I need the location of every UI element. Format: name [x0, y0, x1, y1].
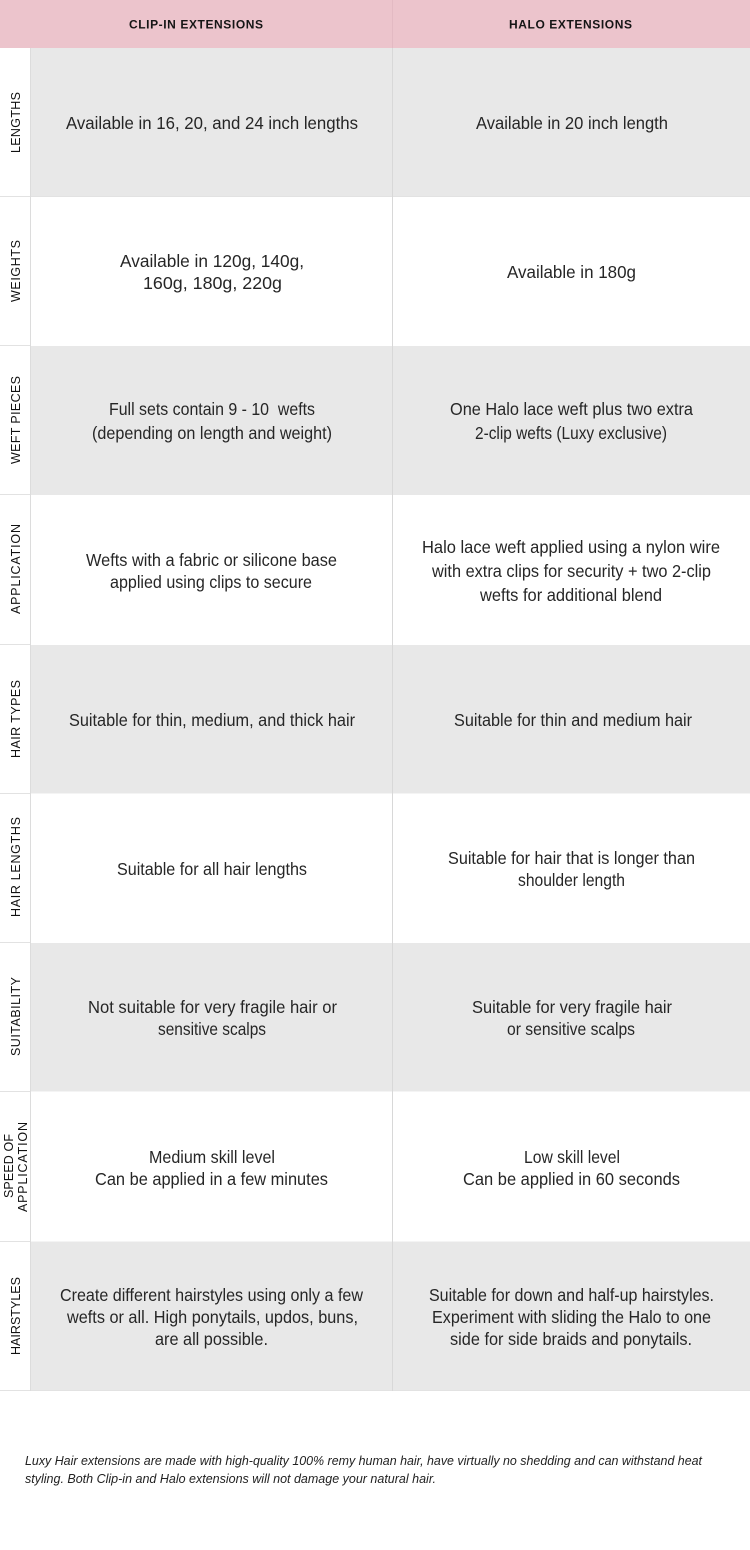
halo: suitability: or sensitive scalps [507, 1019, 635, 1039]
clip-in: suitability: Not suitable for very fragile hair or [88, 997, 337, 1017]
row: hairstyles [0, 1242, 750, 1391]
clip-in: speed of application [95, 1147, 328, 1189]
row: speed of application [0, 1122, 680, 1242]
header row [0, 0, 750, 48]
halo: speed of application [463, 1147, 680, 1189]
clip-in: weights: Available in 120g, 140g, [120, 251, 304, 271]
clip-in: weft pieces: Full sets contain 9 - 10 wefts [109, 399, 315, 419]
halo: weft pieces [450, 399, 693, 443]
row: suitability [0, 943, 750, 1092]
halo: hair lengths: Suitable for hair that is longer than [448, 848, 695, 868]
halo: hairstyles: side for side braids and ponytails. [450, 1329, 692, 1349]
halo: hair types: Suitable for thin and medium hair [454, 710, 692, 730]
halo: application: with extra clips for security + two 2-clip [431, 561, 711, 581]
row label: speed of application: APPLICATION [16, 1122, 30, 1212]
row label: application: APPLICATION [9, 524, 23, 614]
clip-in: speed of application: Can be applied in a few minutes [95, 1169, 328, 1189]
halo: hairstyles: Suitable for down and half-up hairstyles. [429, 1285, 714, 1305]
row: weft pieces [0, 346, 750, 495]
halo: suitability [472, 997, 672, 1039]
clip-in: application: applied using clips to secure [110, 572, 312, 592]
row: hair lengths [0, 817, 695, 943]
footnote [25, 1454, 703, 1486]
clip-in: suitability [88, 997, 337, 1039]
halo: hairstyles [429, 1285, 714, 1349]
clip-in: hairstyles: are all possible. [155, 1329, 268, 1349]
clip-in: weft pieces [92, 399, 332, 443]
row: weights [0, 240, 636, 346]
row label: hair types: HAIR TYPES [9, 680, 23, 758]
row label: speed of application [2, 1122, 30, 1212]
halo: speed of application: Low skill level [524, 1147, 620, 1167]
row: application [0, 524, 720, 645]
row label: speed of application: SPEED OF [2, 1134, 16, 1198]
halo: application: Halo lace weft applied using a nylon wire [422, 537, 720, 557]
row label: hairstyles: HAIRSTYLES [9, 1277, 23, 1355]
clip-in: speed of application: Medium skill level [149, 1147, 275, 1167]
clip-in: lengths: Available in 16, 20, and 24 inch lengths [66, 113, 358, 133]
halo: weights: Available in 180g [507, 262, 636, 282]
halo: application [422, 537, 720, 605]
heading: clip-in extensions: CLIP-IN EXTENSIONS [129, 18, 263, 32]
halo: hair lengths: shoulder length [518, 870, 625, 890]
clip-in: weights: 160g, 180g, 220g [143, 273, 282, 293]
row label: hair lengths: HAIR LENGTHS [9, 817, 23, 917]
row label: weft pieces: WEFT PIECES [9, 376, 23, 464]
row: hair types [0, 645, 750, 794]
clip-in: hairstyles [60, 1285, 363, 1349]
halo: hair lengths [448, 848, 695, 890]
halo: suitability: Suitable for very fragile hair [472, 997, 672, 1017]
clip-in: application: Wefts with a fabric or silicone base [86, 550, 337, 570]
footnote: styling. Both Clip-in and Halo extensions will not damage your natural hair. [25, 1472, 436, 1486]
halo: speed of application: Can be applied in 60 seconds [463, 1169, 680, 1189]
clip-in: hair lengths: Suitable for all hair lengths [117, 859, 307, 879]
row label: weights: WEIGHTS [9, 240, 23, 302]
heading: halo extensions: HALO EXTENSIONS [509, 18, 632, 32]
halo: weft pieces: One Halo lace weft plus two extra [450, 399, 693, 419]
halo: lengths: Available in 20 inch length [476, 113, 668, 133]
row label: lengths: LENGTHS [9, 92, 23, 153]
halo: weft pieces: 2-clip wefts (Luxy exclusive) [475, 423, 667, 443]
clip-in: hair types: Suitable for thin, medium, and thick hair [69, 710, 355, 730]
clip-in: weights [120, 251, 304, 293]
clip-in: weft pieces: (depending on length and weight) [92, 423, 332, 443]
footnote: Luxy Hair extensions are made with high-quality 100% remy human hair, have virtually no shedding and can withstand heat [25, 1454, 703, 1468]
row: lengths [0, 48, 750, 197]
clip-in: hairstyles: Create different hairstyles using only a few [60, 1285, 363, 1305]
halo: application: wefts for additional blend [479, 585, 662, 605]
row label: suitability: SUITABILITY [9, 976, 23, 1056]
clip-in: application [86, 550, 337, 592]
halo: hairstyles: Experiment with sliding the Halo to one [432, 1307, 711, 1327]
clip-in: suitability: sensitive scalps [158, 1019, 266, 1039]
clip-in: hairstyles: wefts or all. High ponytails, updos, buns, [66, 1307, 358, 1327]
